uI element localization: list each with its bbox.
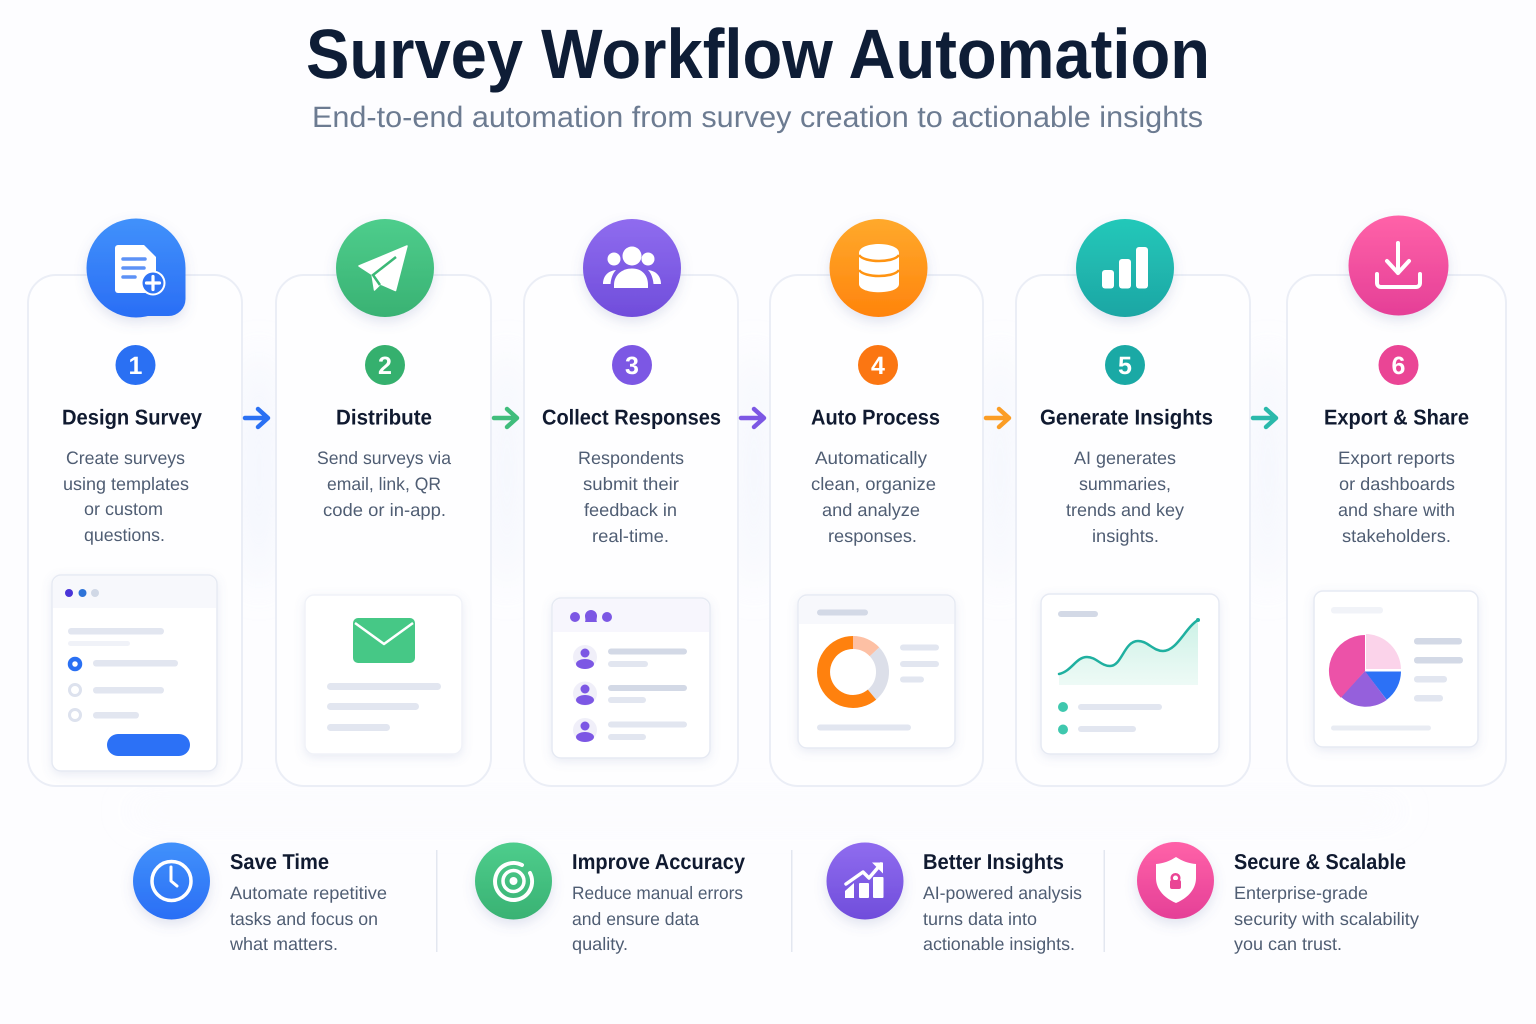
step description: questions. — [84, 525, 165, 545]
step description: or custom — [84, 499, 163, 519]
step number 5 — [1105, 345, 1145, 385]
arrow 2 to 3 — [494, 409, 517, 427]
donut chart mockup — [798, 595, 955, 748]
arrow 3 to 4 — [741, 409, 764, 427]
icon: database — [830, 219, 928, 317]
responses list mockup — [552, 598, 710, 758]
step description: and share with — [1338, 500, 1455, 520]
step description: email, link, QR — [327, 474, 441, 494]
benefit description: and ensure data — [572, 909, 700, 929]
benefit description: turns data into — [923, 909, 1037, 929]
step number 4 — [858, 345, 898, 385]
icon: download — [1348, 216, 1448, 316]
line chart — [1059, 618, 1200, 685]
benefit: save time — [133, 842, 387, 954]
benefit description — [572, 883, 743, 954]
title: Survey Workflow Automation — [306, 15, 1210, 93]
icon: bar chart — [1076, 219, 1174, 317]
icon: envelope — [353, 618, 415, 663]
benefit heading: Secure & Scalable — [1234, 850, 1406, 874]
step description — [578, 448, 684, 546]
donut chart — [824, 642, 883, 701]
step description: code or in-app. — [323, 500, 446, 520]
email mockup — [305, 595, 462, 754]
step number 4: 4 — [871, 352, 885, 380]
panel: step 1 design survey — [28, 218, 242, 786]
step heading: Design Survey — [62, 406, 202, 430]
step description: feedback in — [584, 500, 677, 520]
benefit description: you can trust. — [1234, 934, 1342, 954]
benefit: improve accuracy — [475, 842, 745, 954]
step description — [1066, 448, 1184, 546]
step number 1 — [116, 345, 156, 385]
benefit description: Enterprise-grade — [1234, 883, 1368, 903]
survey form mockup — [52, 575, 217, 771]
step number 3 — [612, 345, 652, 385]
benefit description — [1234, 883, 1419, 954]
step number 1: 1 — [129, 352, 143, 380]
arrow 5 to 6 — [1253, 409, 1276, 427]
panel: step 6 export and share — [1287, 216, 1506, 786]
step description: Export reports — [1338, 448, 1455, 468]
arrow 4 to 5 — [986, 409, 1009, 427]
icon: group of people — [583, 219, 681, 317]
benefit description — [229, 883, 387, 954]
benefit description: what matters. — [229, 934, 338, 954]
step description: AI generates — [1074, 448, 1176, 468]
step description — [317, 448, 452, 520]
step heading: Export & Share — [1324, 406, 1469, 430]
benefit heading: Improve Accuracy — [572, 850, 745, 874]
step number 2 — [365, 345, 405, 385]
benefit description: security with scalability — [1234, 909, 1419, 929]
step heading: Collect Responses — [542, 406, 721, 430]
step description: using templates — [63, 474, 189, 494]
panel: step 2 distribute — [276, 219, 491, 786]
benefit description — [923, 883, 1082, 954]
step description: trends and key — [1066, 500, 1184, 520]
step number 6 — [1378, 345, 1418, 385]
benefit heading: Save Time — [230, 850, 329, 874]
subtitle: End-to-end automation from survey creation to actionable insights — [312, 101, 1203, 134]
step description: Respondents — [578, 448, 684, 468]
icon: growth chart — [826, 842, 904, 920]
step number 5: 5 — [1118, 352, 1132, 380]
icon: shield with lock — [1137, 842, 1214, 919]
step description: Create surveys — [66, 448, 185, 468]
step description: responses. — [828, 526, 917, 546]
benefit heading: Better Insights — [923, 850, 1064, 874]
icon: clock — [133, 842, 210, 920]
step description: stakeholders. — [1342, 526, 1451, 546]
panel: step 4 auto process — [770, 219, 983, 786]
step description: submit their — [583, 474, 679, 494]
icon: paper plane — [336, 219, 434, 317]
benefit description: actionable insights. — [923, 934, 1075, 954]
step number 2: 2 — [378, 352, 392, 380]
step heading: Auto Process — [811, 406, 940, 430]
benefit description: quality. — [572, 934, 628, 954]
step description: Automatically — [815, 448, 927, 468]
benefit: better insights — [826, 842, 1082, 954]
step description: Send surveys via — [317, 448, 452, 468]
step description: summaries, — [1079, 474, 1171, 494]
step description: insights. — [1092, 526, 1159, 546]
benefit description: Automate repetitive — [230, 883, 387, 903]
step description: or dashboards — [1339, 474, 1455, 494]
benefit: secure and scalable — [1137, 842, 1419, 954]
pie chart — [1329, 634, 1401, 707]
benefit description: Reduce manual errors — [572, 883, 743, 903]
background glows — [130, 350, 1400, 814]
step description — [1338, 448, 1455, 546]
step description — [811, 448, 936, 546]
step description — [63, 448, 189, 545]
step description: and analyze — [822, 500, 920, 520]
step description: clean, organize — [811, 474, 936, 494]
icon: document with plus — [86, 218, 186, 318]
step heading: Distribute — [336, 406, 432, 430]
benefit description: AI-powered analysis — [923, 883, 1082, 903]
step heading: Generate Insights — [1040, 406, 1213, 430]
line chart mockup — [1041, 594, 1219, 754]
panel: step 5 generate insights — [1016, 219, 1250, 786]
arrow 1 to 2 — [245, 409, 268, 427]
pie chart mockup — [1314, 591, 1478, 747]
step description: real-time. — [592, 526, 669, 546]
panel: step 3 collect responses — [524, 219, 738, 786]
benefit description: tasks and focus on — [230, 909, 378, 929]
step number 6: 6 — [1392, 352, 1405, 380]
icon: target — [475, 842, 552, 920]
step number 3: 3 — [625, 352, 639, 380]
